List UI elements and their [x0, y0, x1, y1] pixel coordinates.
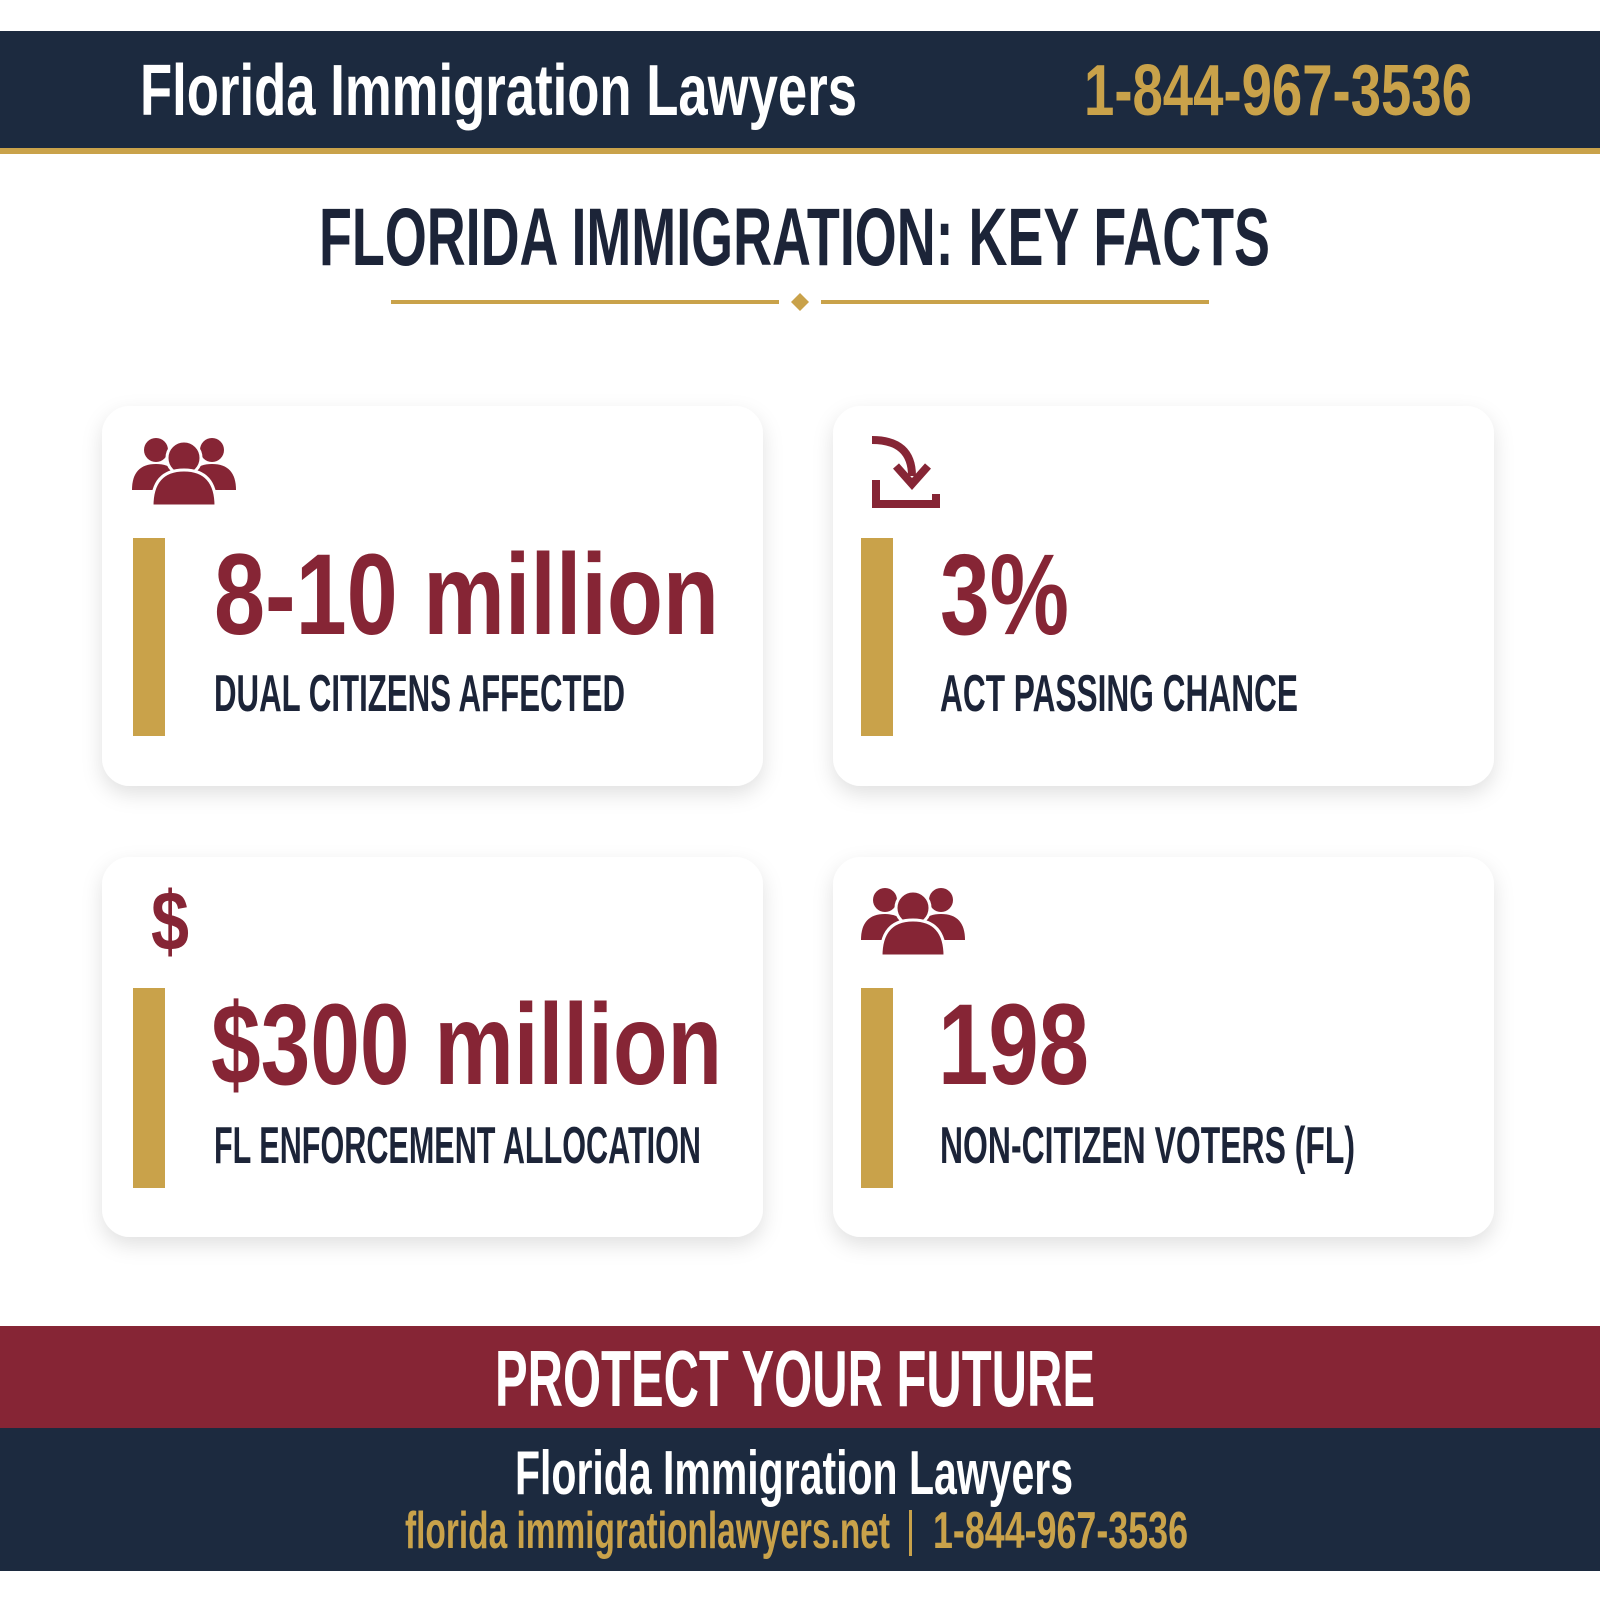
header bar — [0, 31, 1600, 154]
icon: download arrow — [872, 440, 936, 504]
panel: non-citizen voters — [833, 857, 1494, 1237]
cta banner: PROTECT YOUR FUTURE — [495, 1334, 1095, 1423]
panel: act passing chance — [833, 406, 1494, 786]
label: NON-CITIZEN VOTERS (FL) — [940, 1117, 1355, 1175]
number: 198 — [938, 981, 1089, 1109]
header phone: 1-844-967-3536 — [1084, 51, 1472, 131]
panel: dual citizens — [102, 406, 763, 786]
icon: people — [861, 888, 965, 956]
number: 3% — [940, 531, 1069, 659]
label: FL ENFORCEMENT ALLOCATION — [214, 1117, 701, 1175]
footer firm name: Florida Immigration Lawyers — [515, 1439, 1073, 1508]
number: $300 million — [211, 981, 722, 1109]
title divider — [391, 293, 1209, 311]
number: 8-10 million — [214, 531, 719, 659]
footer contact: florida immigrationlawyers.net — [405, 1502, 890, 1560]
header firm name: Florida Immigration Lawyers — [140, 51, 857, 131]
panel: enforcement allocation — [102, 857, 763, 1237]
footer — [0, 1428, 1600, 1571]
label: ACT PASSING CHANCE — [940, 665, 1298, 723]
footer: 1-844-967-3536 — [933, 1502, 1188, 1560]
label: DUAL CITIZENS AFFECTED — [214, 665, 625, 723]
icon: dollar: $ — [151, 874, 189, 968]
icon: people — [132, 438, 236, 506]
cta banner — [0, 1326, 1600, 1428]
